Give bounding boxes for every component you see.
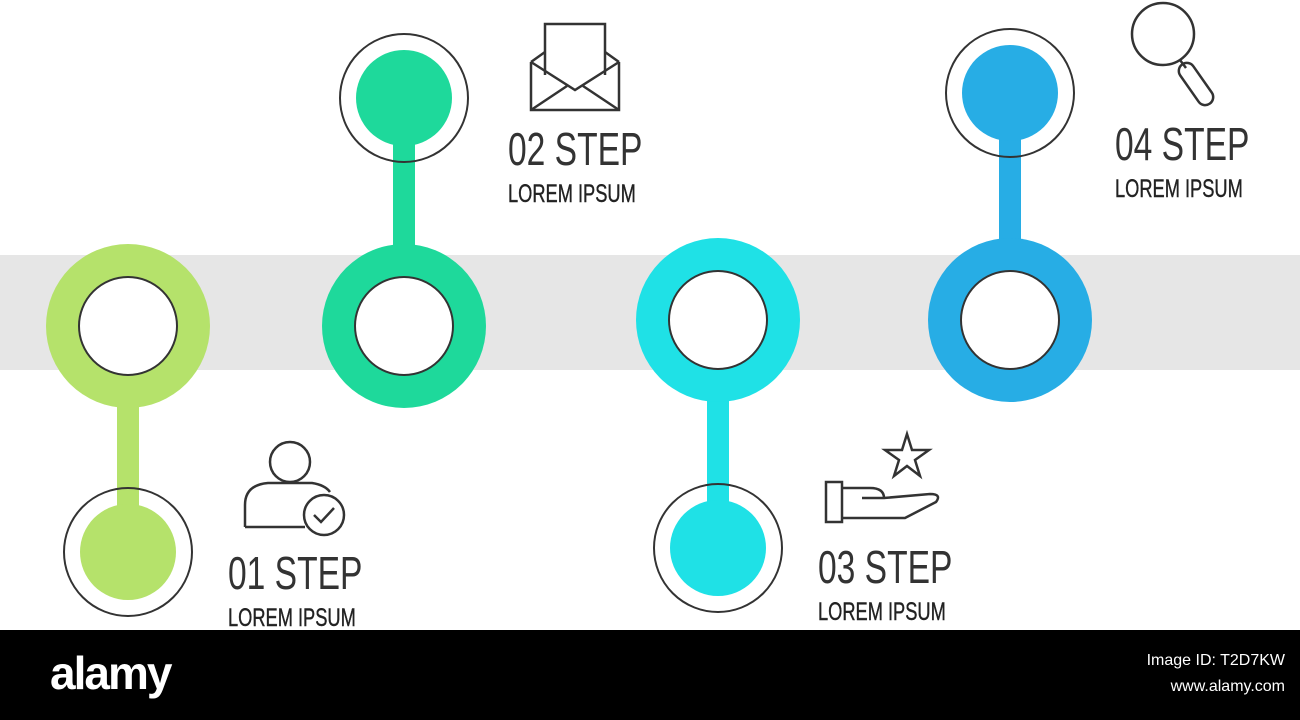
step 1 text: LOREM IPSUM — [228, 604, 356, 632]
step 2 text — [508, 123, 642, 208]
step 2 text: 02 STEP — [508, 123, 642, 175]
icon: envelope — [531, 24, 619, 110]
icon: user check — [245, 442, 344, 535]
icon: hand with star — [826, 434, 938, 522]
step 3 text: LOREM IPSUM — [818, 598, 946, 626]
footer info: Image ID: T2D7KW — [1147, 652, 1285, 669]
step 2 node — [322, 34, 486, 408]
step 4 text: 04 STEP — [1115, 118, 1249, 170]
step 1 text: 01 STEP — [228, 547, 362, 599]
footer logo: alamy — [50, 647, 170, 699]
gray band — [0, 255, 1300, 370]
step 4 text: LOREM IPSUM — [1115, 175, 1243, 203]
footer info: www.alamy.com — [1171, 678, 1285, 695]
step 1 text — [228, 547, 362, 632]
step 2 text: LOREM IPSUM — [508, 180, 636, 208]
step 3 node — [636, 238, 800, 612]
step 1 node — [46, 244, 210, 616]
icon: magnifier — [1132, 3, 1216, 108]
step 3 text: 03 STEP — [818, 541, 952, 593]
footer info — [1147, 652, 1285, 695]
step 4 node — [928, 29, 1092, 402]
step 4 text — [1115, 118, 1249, 203]
footer bar — [0, 630, 1300, 720]
step 3 text — [818, 541, 952, 626]
